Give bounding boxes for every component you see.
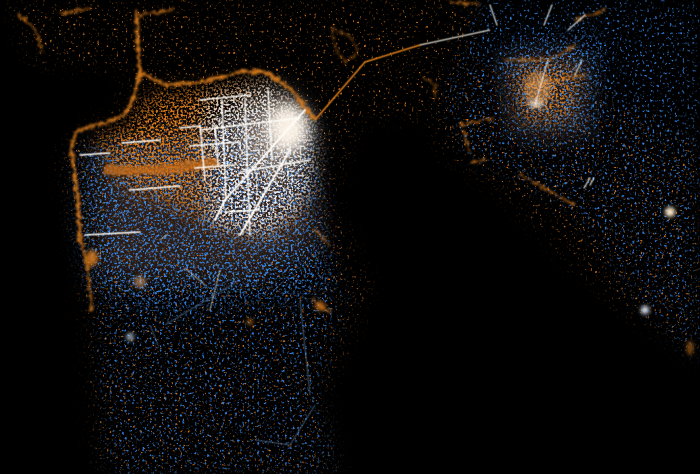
Treasure Island ring (332, 28, 358, 62)
Oakland shoreline (424, 2, 575, 205)
Golden Gate Park band (108, 163, 215, 170)
east bay white streets (490, 5, 594, 188)
Berkeley hot spots (505, 10, 605, 85)
orange speckle north San Francisco (95, 65, 580, 235)
west coast beach (80, 240, 92, 310)
Bay Bridge white east span (420, 30, 490, 45)
panel: San Francisco dense blue and orange speckle (80, 30, 600, 310)
southeast San Francisco shore (312, 230, 330, 312)
glow: downtown San Francisco (238, 95, 308, 175)
blue speckle San Francisco (80, 30, 600, 310)
white street grid San Francisco (0, 90, 310, 310)
northwest coast to Land's End (71, 72, 140, 240)
east bay city glow (86, 72, 693, 355)
orange coastlines and shoreline (18, 2, 605, 312)
white-blue speckle northeast San Francisco (205, 85, 312, 235)
Bay Bridge (315, 45, 420, 120)
Marin coast (18, 8, 175, 52)
soft ambient glow of San Francisco (95, 50, 590, 280)
Golden Gate and north shore (136, 12, 315, 120)
blue streets on the peninsula (150, 280, 315, 445)
